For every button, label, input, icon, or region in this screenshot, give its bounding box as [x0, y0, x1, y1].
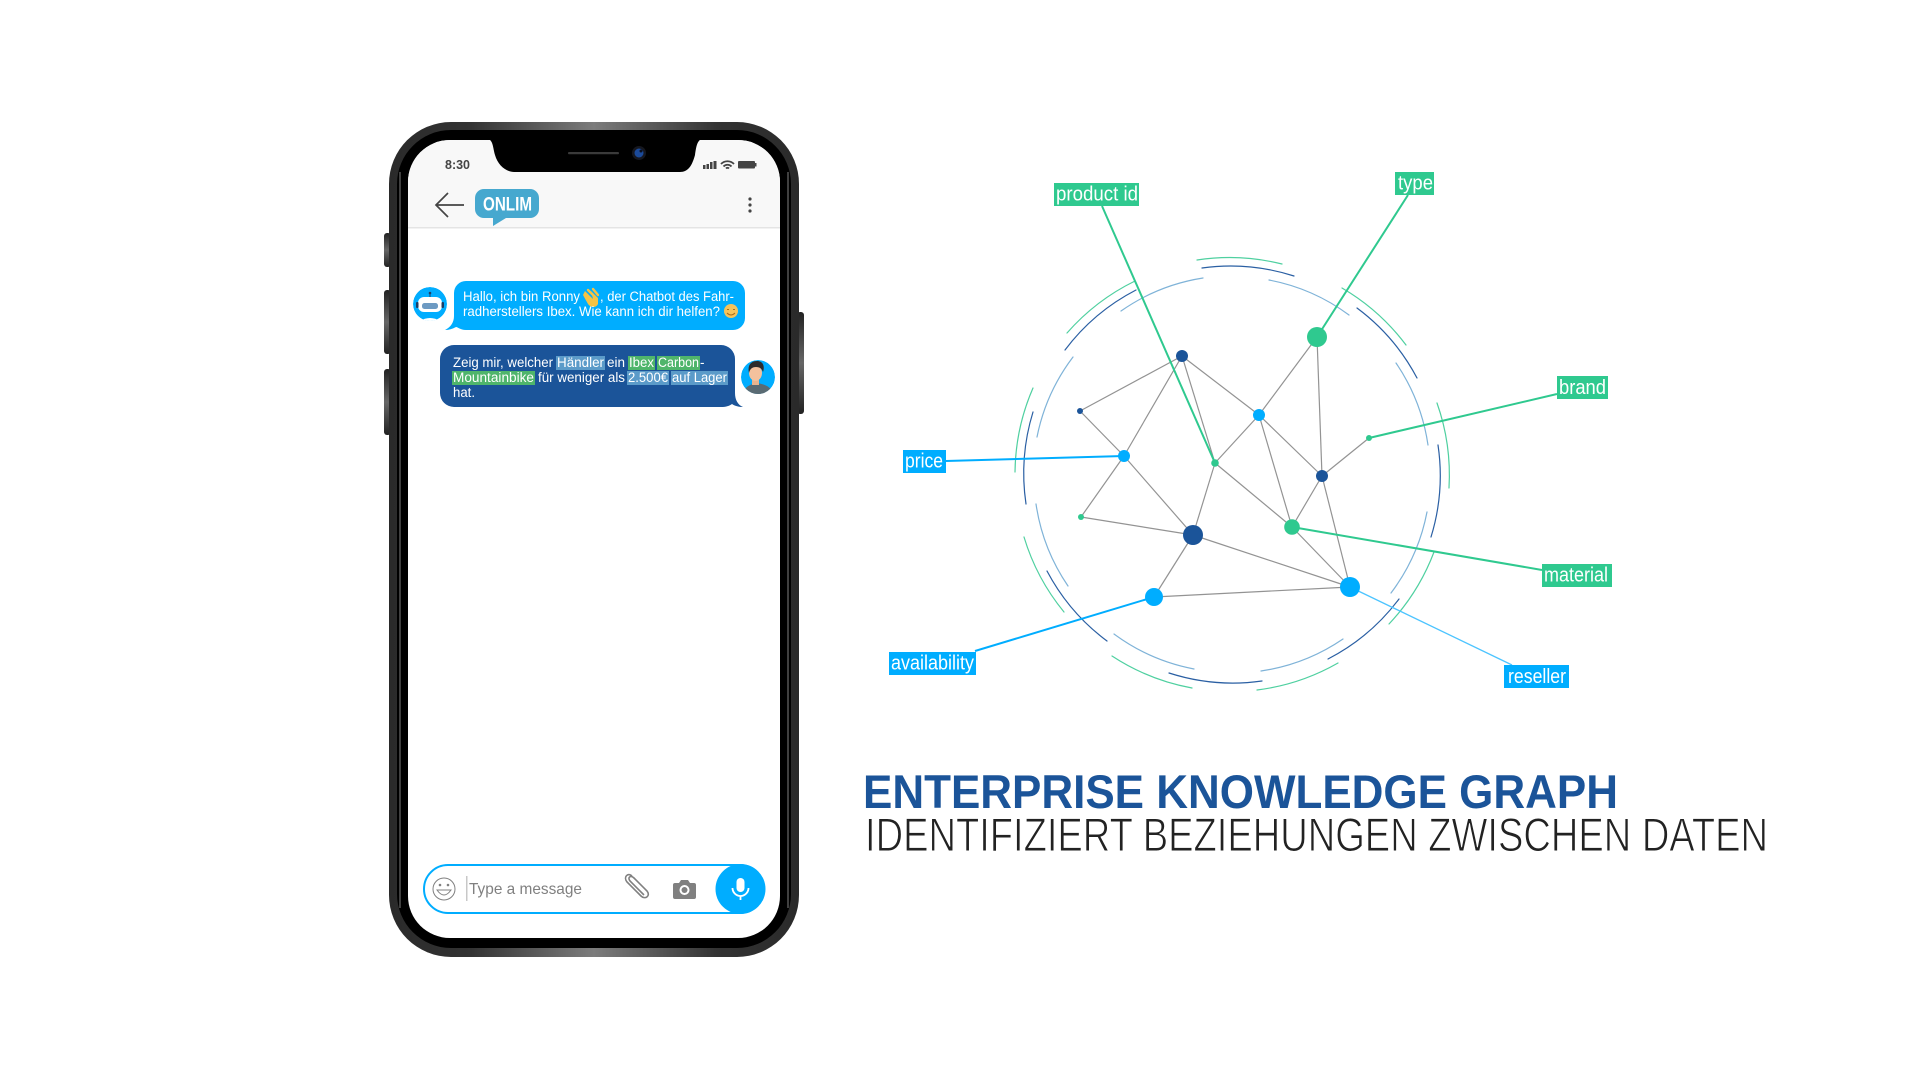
ring arcs: green	[1015, 258, 1449, 690]
icon: menu dots	[748, 197, 752, 213]
graph nodes	[1077, 327, 1372, 606]
icon: back arrow	[436, 193, 464, 217]
header divider	[408, 227, 780, 228]
icon: camera	[673, 880, 696, 899]
status time: 8:30	[445, 158, 470, 172]
message text: Händler	[557, 355, 604, 370]
icon: battery	[738, 161, 756, 168]
bot message bubble: radherstellers Ibex. Wie kann ich dir helfen?	[463, 304, 720, 319]
ring arcs: dark blue	[1024, 266, 1440, 683]
icon: smile emoji	[724, 304, 738, 318]
label: brand: brand	[1559, 377, 1606, 399]
speaker	[568, 152, 619, 154]
message text	[453, 355, 727, 400]
label: product id: product id	[1056, 184, 1138, 206]
label connector lines	[946, 195, 1557, 665]
inner bezel	[397, 130, 791, 948]
icon: signal	[703, 161, 716, 169]
front camera	[632, 146, 646, 160]
ring arcs: light blue	[1036, 278, 1428, 671]
message text: auf Lager	[672, 370, 727, 385]
label: availability: availability	[891, 652, 974, 674]
icon: waving hand emoji	[583, 289, 598, 307]
message text: für weniger als	[538, 370, 625, 385]
logo: ONLIM	[483, 194, 532, 216]
label: price: price	[905, 450, 943, 472]
title: ENTERPRISE KNOWLEDGE GRAPH	[863, 765, 1618, 818]
side buttons	[384, 233, 804, 435]
message text: Carbon	[658, 355, 699, 370]
bot avatar	[413, 287, 447, 321]
label: material: material	[1544, 564, 1608, 586]
logo	[475, 189, 539, 226]
bot message bubble: , der Chatbot des Fahr-	[600, 289, 734, 304]
bot message bubble: Hallo, ich bin Ronny	[463, 289, 580, 304]
icon: paperclip	[626, 875, 648, 898]
icon: emoji	[433, 878, 455, 900]
bezel highlight	[400, 172, 788, 908]
phone frame	[389, 122, 799, 957]
placeholder: Type a message	[469, 881, 582, 898]
icon: wifi	[721, 161, 734, 168]
bot message bubble	[445, 281, 745, 330]
label: type: type	[1398, 172, 1433, 194]
message text: 2.500€	[628, 370, 668, 385]
phone	[384, 122, 804, 957]
label: reseller: reseller	[1508, 666, 1566, 688]
screen	[408, 140, 780, 938]
message text: -	[700, 355, 704, 370]
message text: Zeig mir, welcher	[453, 355, 553, 370]
mic button	[716, 864, 766, 914]
message text: ein	[607, 355, 625, 370]
user message bubble	[440, 345, 743, 407]
message text: Ibex	[629, 355, 654, 370]
notch	[488, 139, 702, 172]
graph edges	[1080, 337, 1369, 597]
message input bar	[424, 864, 766, 914]
app header	[408, 140, 780, 228]
message text: hat.	[453, 385, 475, 400]
message text: Mountainbike	[453, 370, 534, 385]
knowledge graph	[889, 172, 1612, 690]
entity highlights	[452, 356, 728, 385]
user avatar	[741, 360, 775, 396]
text caret	[466, 876, 468, 901]
